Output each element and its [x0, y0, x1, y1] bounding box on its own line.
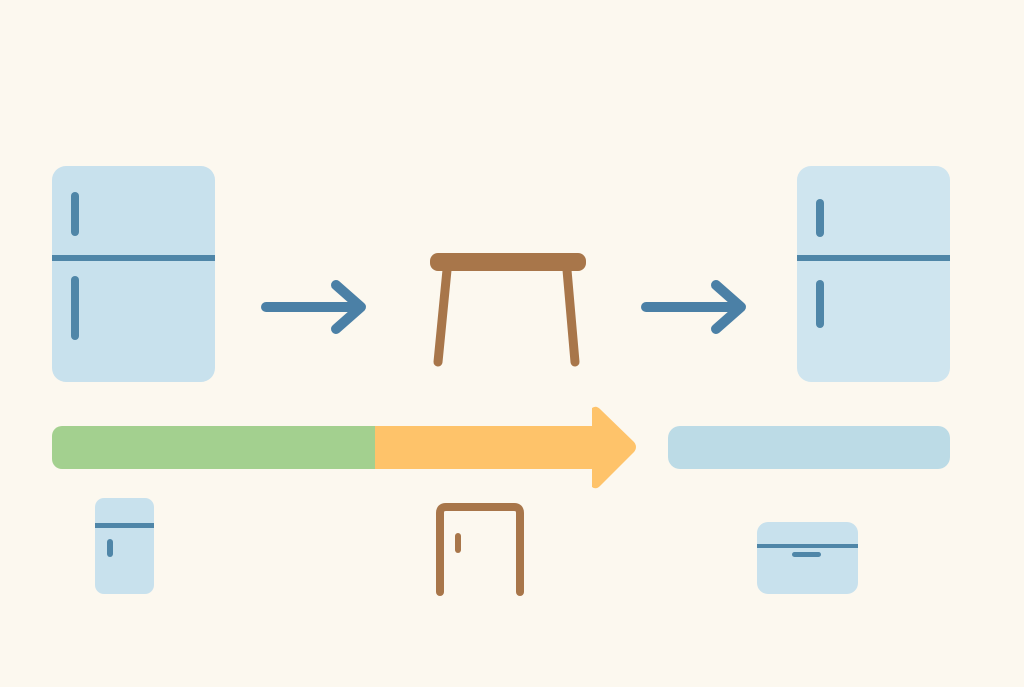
icon: small doorway/cabinet — [440, 507, 520, 592]
icon: table — [430, 253, 586, 362]
icon: small fridge — [95, 498, 154, 594]
icon: large fridge right — [797, 166, 950, 382]
icon: small chest freezer — [757, 522, 858, 594]
icon: large fridge left — [52, 166, 215, 382]
blue bar — [668, 426, 950, 469]
progress arrow bar — [52, 407, 636, 488]
arrow: table to fridge — [646, 285, 741, 329]
arrow: fridge to table — [266, 285, 361, 329]
